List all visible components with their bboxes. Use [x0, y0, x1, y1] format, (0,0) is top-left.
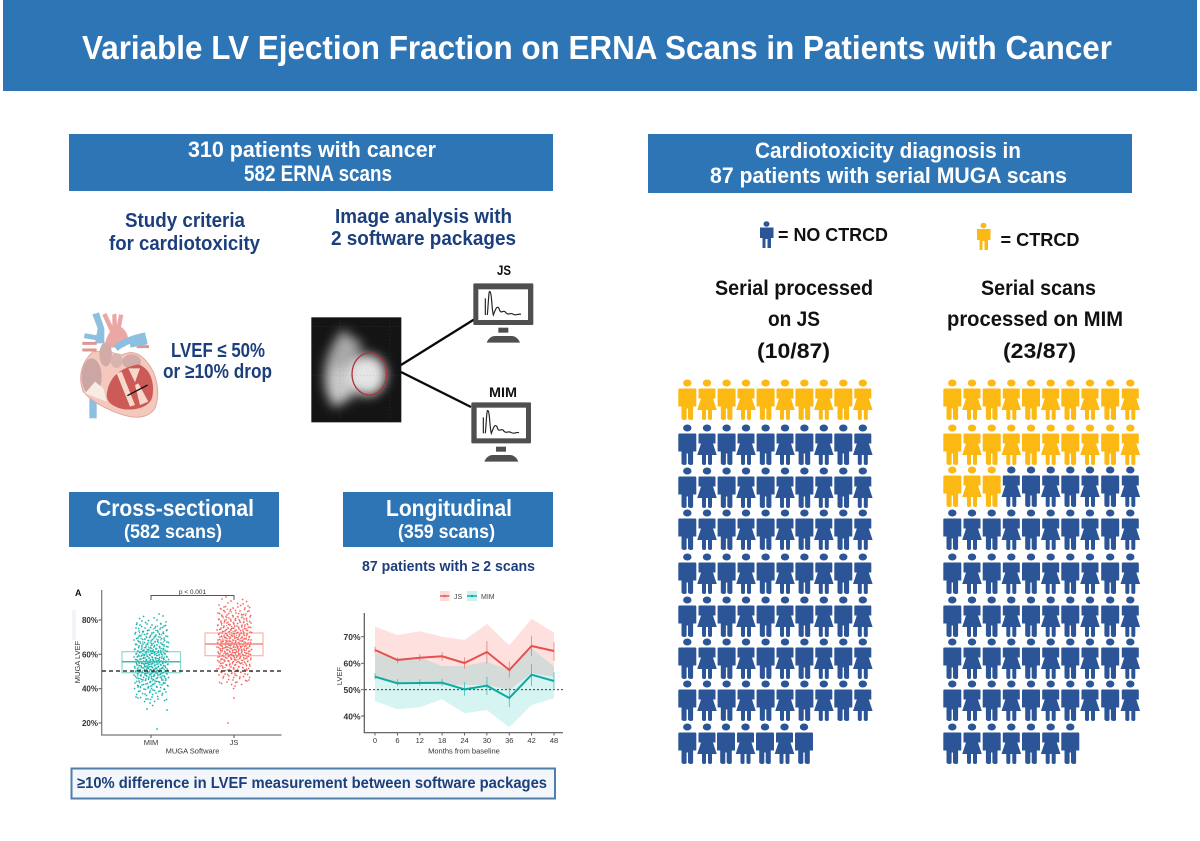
- text: 87 patients with 2 or more scans: 87 patients with ≥ 2 scans: [362, 558, 535, 575]
- panel heading: 310 patients: 310 patients with cancer: [188, 137, 436, 162]
- panel heading: 310 patients: [69, 134, 553, 191]
- chart: cross-sectional boxplot: 20%: [82, 719, 98, 728]
- heading: study criteria: Study criteria: [125, 210, 246, 232]
- chart: longitudinal LVEF lines: 50%: [343, 685, 361, 695]
- pictogram: JS 10 of 87: [678, 380, 873, 764]
- text: LVEF criteria: LVEF ≤ 50%: [171, 340, 265, 362]
- chart: longitudinal LVEF lines: 60%: [343, 658, 361, 668]
- title banner: [3, 0, 1197, 91]
- panel heading: cardiotoxicity diagnosis: 87 patients with serial MUGA scans: [710, 163, 1067, 188]
- heading: image analysis: [331, 206, 516, 250]
- chart: cross-sectional boxplot: A: [75, 588, 82, 598]
- chart: longitudinal LVEF lines: 36: [505, 736, 513, 745]
- chart: longitudinal LVEF lines: [335, 591, 564, 756]
- heading: longitudinal: (359 scans): [398, 522, 495, 543]
- panel heading: cardiotoxicity diagnosis: [648, 134, 1132, 193]
- chart: cross-sectional boxplot: MUGA Software: [166, 746, 219, 756]
- connector arrows to monitors: [401, 320, 474, 407]
- chart: longitudinal LVEF lines: 12: [416, 736, 424, 745]
- chart: cross-sectional boxplot: MUGA LVEF: [73, 640, 82, 683]
- chart: cross-sectional boxplot: p < 0.001: [179, 589, 207, 596]
- heading: study criteria: [109, 210, 261, 255]
- heading: image analysis: Image analysis with: [335, 206, 512, 228]
- heading: serial processed on JS: Serial processed: [715, 277, 873, 300]
- box: JS: [205, 597, 263, 723]
- chart: longitudinal LVEF lines: 24: [460, 736, 469, 745]
- heading: longitudinal: [343, 492, 553, 547]
- chart: cross-sectional boxplot: MIM: [144, 738, 158, 747]
- icon: JS monitor: [473, 283, 533, 343]
- legend: JS: [454, 594, 462, 601]
- label: MIM: MIM: [489, 384, 517, 400]
- chart: cross-sectional boxplot: [72, 588, 282, 756]
- chart: cross-sectional boxplot: 60%: [82, 650, 98, 659]
- image: ERNA nuclear scan: [311, 317, 401, 422]
- text: LVEF criteria: [163, 340, 272, 383]
- chart: cross-sectional boxplot: 40%: [82, 685, 98, 694]
- chart: longitudinal LVEF lines: 48: [550, 736, 558, 745]
- chart: longitudinal LVEF lines: 30: [483, 736, 491, 745]
- chart: longitudinal LVEF lines: LVEF: [335, 666, 344, 685]
- callout: difference between software packages: [72, 768, 555, 798]
- heading: image analysis: 2 software packages: [331, 228, 516, 250]
- heading: longitudinal: Longitudinal: [386, 495, 512, 521]
- callout: difference between software packages: ≥10% difference in LVEF measurement between software packages: [77, 775, 547, 792]
- heading: serial scans processed on MIM: (23/87): [1003, 340, 1076, 363]
- error bars MIM: [375, 664, 554, 707]
- heading: study criteria: for cardiotoxicity: [109, 233, 261, 255]
- heading: serial scans processed on MIM: processed on MIM: [947, 308, 1123, 331]
- error bars JS: [375, 636, 554, 678]
- legend: CTRCD: = CTRCD: [1000, 229, 1080, 250]
- legend: CTRCD: [977, 223, 1080, 250]
- chart: longitudinal LVEF lines: 18: [438, 736, 446, 745]
- heading: cross-sectional: Cross-sectional: [96, 495, 254, 521]
- heading: cross-sectional: (582 scans): [124, 522, 222, 543]
- chart: cross-sectional boxplot: JS: [230, 738, 238, 747]
- heading: serial processed on JS: on JS: [768, 308, 820, 331]
- pictogram: MIM 23 of 87: [943, 380, 1140, 764]
- legend: MIM: [481, 594, 495, 601]
- legend: [440, 591, 495, 601]
- legend: no CTRCD: = NO CTRCD: [778, 224, 888, 245]
- heading: cross-sectional: [69, 492, 279, 547]
- panel heading: cardiotoxicity diagnosis: Cardiotoxicity diagnosis in: [755, 138, 1021, 163]
- JS trend line: [375, 646, 554, 670]
- MIM trend line: [375, 675, 554, 698]
- box: MIM: [122, 614, 180, 729]
- heading: serial processed on JS: [715, 277, 873, 363]
- panel heading: 310 patients: 582 ERNA scans: [244, 161, 392, 186]
- heading: serial scans processed on MIM: Serial scans: [981, 277, 1096, 300]
- chart: cross-sectional boxplot: 80%: [82, 616, 98, 625]
- heading: serial processed on JS: (10/87): [757, 340, 830, 363]
- icon: MIM monitor: [471, 402, 531, 462]
- icon: heart anatomy: [81, 312, 158, 418]
- legend: no CTRCD: [760, 221, 888, 248]
- label: JS: JS: [497, 262, 511, 278]
- chart: longitudinal LVEF lines: Months from baseline: [428, 746, 500, 756]
- chart: longitudinal LVEF lines: 42: [527, 736, 536, 745]
- chart: longitudinal LVEF lines: 6: [395, 736, 399, 745]
- chart: longitudinal LVEF lines: 0: [373, 736, 377, 745]
- title banner: Variable LV Ejection Fraction on ERNA Scans in Patients with Cancer: [82, 30, 1112, 67]
- heading: serial scans processed on MIM: [947, 277, 1123, 363]
- text: LVEF criteria: or ≥10% drop: [163, 361, 272, 383]
- chart: longitudinal LVEF lines: 70%: [343, 632, 361, 642]
- chart: longitudinal LVEF lines: 40%: [343, 711, 361, 721]
